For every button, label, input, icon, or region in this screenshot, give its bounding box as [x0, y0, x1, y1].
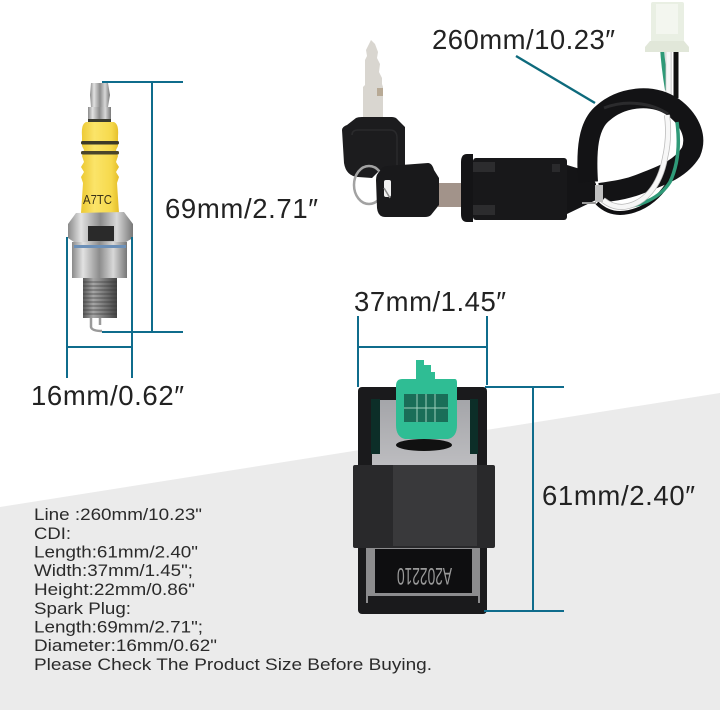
label: CDI length: 61mm/2.40″ — [542, 480, 695, 511]
icon: ignition keys — [342, 40, 463, 217]
text block: product specifications: Height:22mm/0.86" — [34, 580, 195, 599]
label: CDI width: 37mm/1.45″ — [354, 286, 506, 317]
dimension lines: CDI width — [358, 316, 487, 387]
icon: CDI unit — [353, 360, 495, 614]
background: grey diagonal panel — [0, 393, 720, 710]
leader line: cable length — [516, 56, 595, 103]
dimension lines: spark plug diameter — [67, 237, 132, 378]
text block: product specifications — [34, 505, 432, 674]
text block: product specifications: CDI: — [34, 524, 71, 543]
dimension lines: CDI length — [484, 387, 564, 611]
icon: ignition switch barrel — [461, 154, 596, 222]
icon: wiring loop and connector — [582, 2, 693, 213]
text block: product specifications: Diameter:16mm/0.62" — [34, 636, 217, 655]
icon: green connector — [396, 360, 457, 439]
icon: spark plug — [68, 83, 133, 331]
text block: product specifications: Spark Plug: — [34, 599, 131, 618]
text block: product specifications: Line :260mm/10.23" — [34, 505, 202, 524]
label: CDI model number: A202210 — [397, 562, 452, 589]
text block: product specifications: Length:61mm/2.40" — [34, 542, 198, 562]
dimension lines: spark plug length — [102, 82, 183, 332]
label: A7TC: A7TC — [83, 192, 112, 207]
text block: product specifications: Please Check The Product Size Before Buying. — [34, 655, 432, 674]
label: cable length: 260mm/10.23″ — [432, 24, 615, 55]
text block: product specifications: Length:69mm/2.71"; — [34, 618, 203, 636]
text block: product specifications: Width:37mm/1.45"; — [34, 561, 193, 580]
label: spark plug length: 69mm/2.71″ — [165, 193, 318, 224]
label: spark plug diameter: 16mm/0.62″ — [31, 380, 184, 411]
